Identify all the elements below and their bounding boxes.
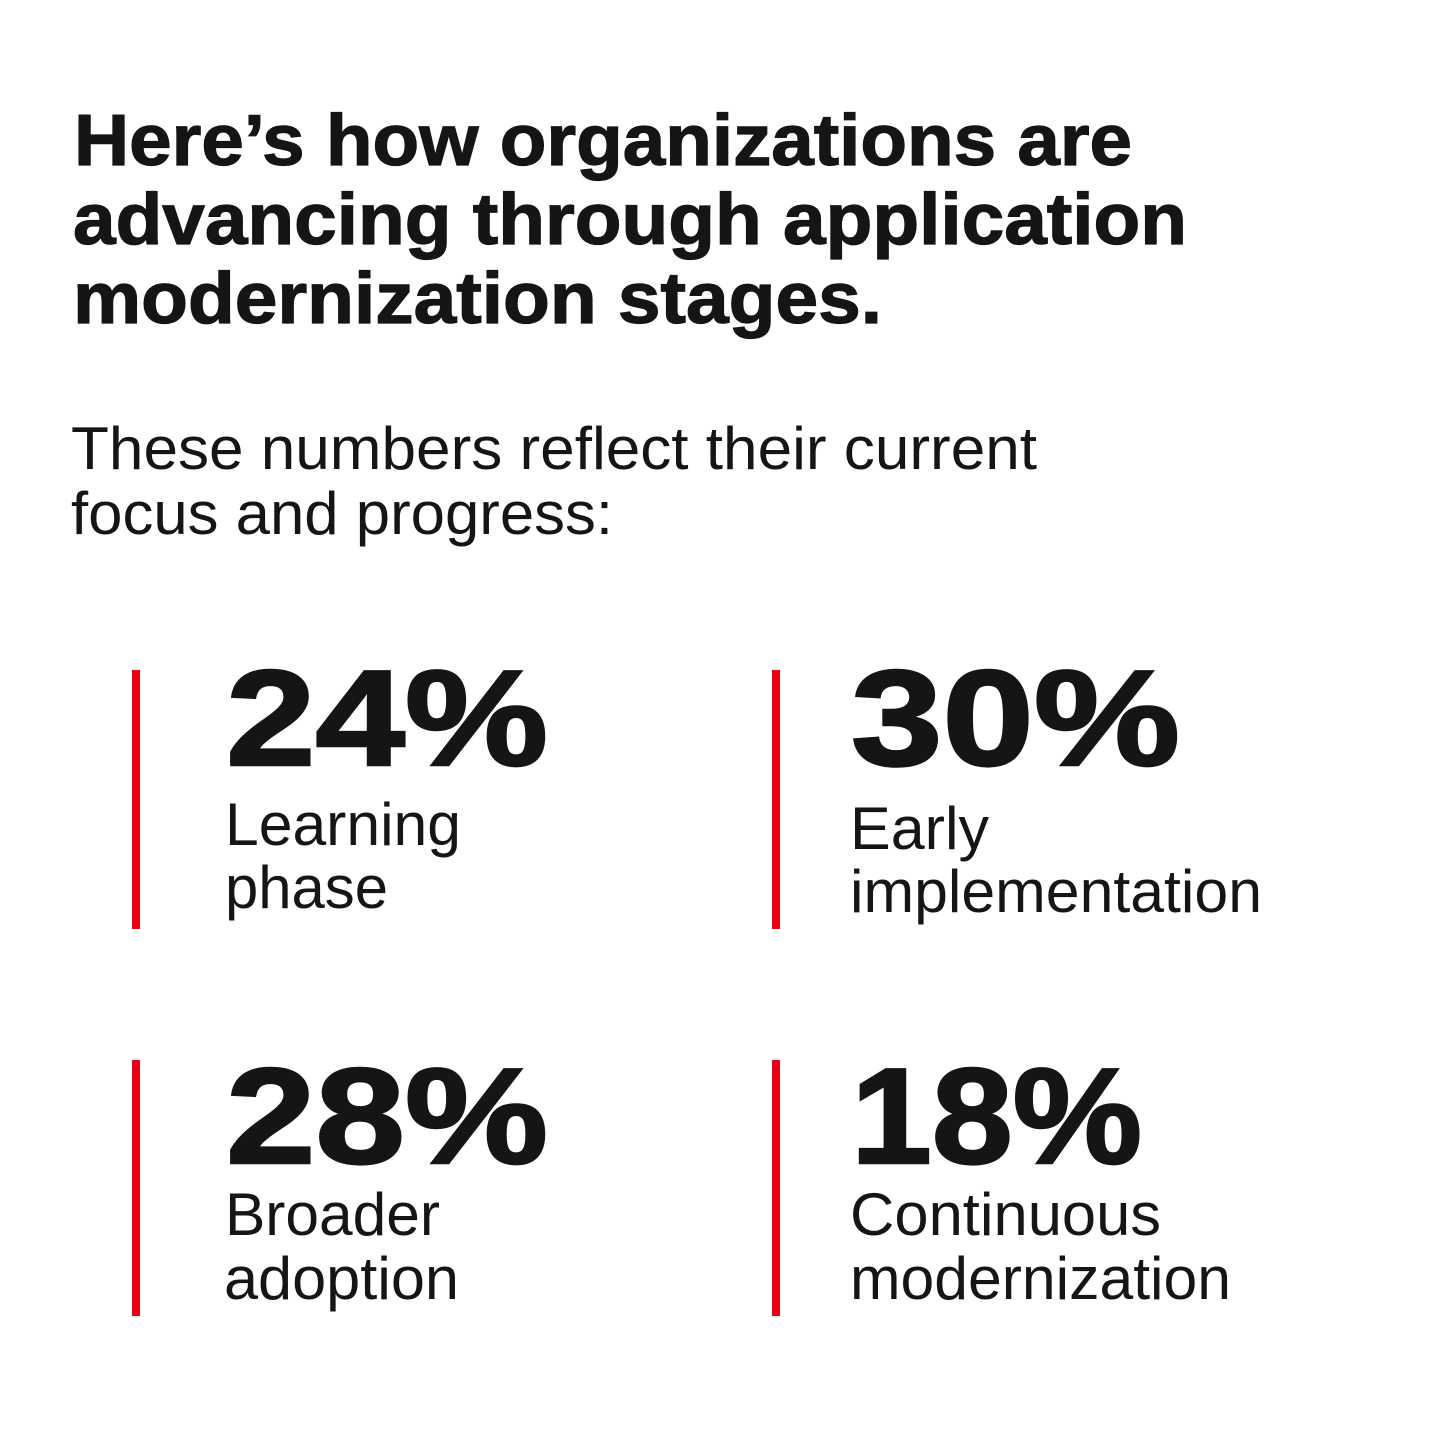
label: Continuous [850,1181,1161,1248]
label [850,795,1262,925]
label [224,1181,459,1312]
stat: 28% broader adoption [132,1040,548,1316]
stat: 24% learning phase [132,642,548,929]
stat: 30% early implementation [772,642,1262,929]
stat: 18% continuous modernization [772,1040,1231,1316]
title: advancing through application [73,180,1187,260]
number 28%: 28% [226,1040,548,1192]
label: implementation [850,858,1262,925]
red bar [132,1060,140,1316]
red bar [772,1060,780,1316]
label [850,1181,1231,1312]
number 18%: 18% [851,1040,1142,1192]
red bar [772,670,780,929]
title [73,101,1187,339]
label: adoption [224,1245,459,1312]
number 30%: 30% [851,642,1180,794]
label: phase [225,854,388,921]
title: modernization stages. [73,259,882,339]
number 24%: 24% [226,642,548,794]
label: Early [850,795,989,862]
title: Here’s how organizations are [74,101,1132,181]
label: modernization [850,1245,1231,1312]
label: Broader [225,1181,440,1248]
red bar [132,670,140,929]
subtitle text [71,415,1037,547]
subtitle text: focus and progress: [71,480,613,547]
subtitle text: These numbers reflect their current [71,415,1037,482]
label [225,791,461,921]
label: Learning [225,791,461,858]
